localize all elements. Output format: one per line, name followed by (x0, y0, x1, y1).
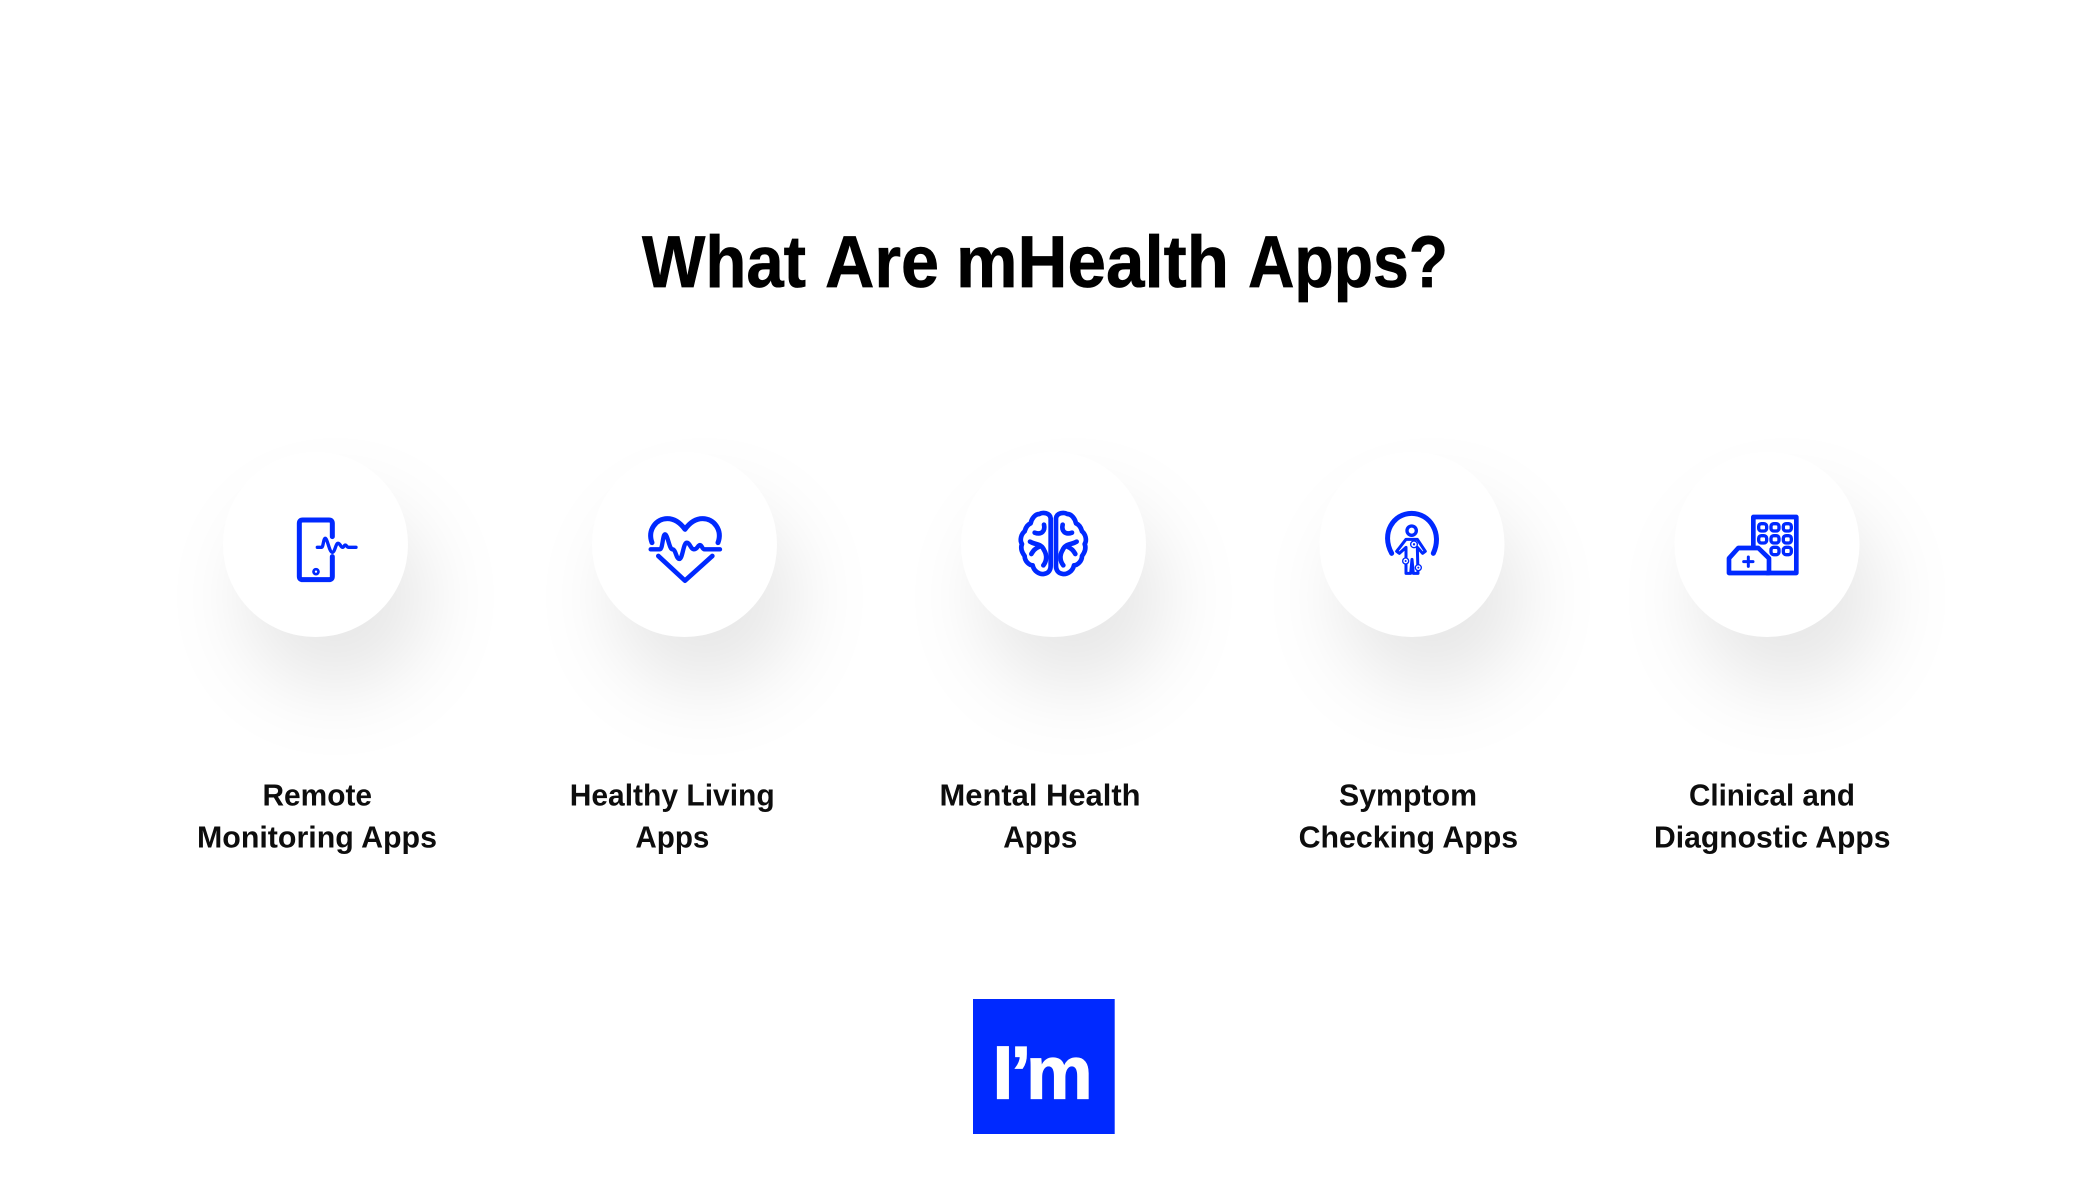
icon circle: healthy living (592, 452, 777, 637)
label: healthy living apps (570, 778, 775, 854)
label: clinical and diagnostic apps: Clinical and (1689, 778, 1855, 812)
label: symptom checking apps: Symptom (1339, 778, 1477, 812)
label: healthy living apps: Apps (635, 820, 709, 854)
logo (973, 999, 1115, 1134)
icon circle: remote monitoring (223, 452, 408, 637)
label: remote monitoring apps: Monitoring Apps (197, 820, 437, 854)
label: mental health apps (940, 778, 1140, 854)
icon circle: clinical and diagnostic (1674, 452, 1860, 637)
icon: person with symptom markers (1388, 513, 1436, 573)
panel: clinical and diagnostic apps (1654, 452, 1890, 854)
label: symptom checking apps (1299, 778, 1518, 854)
icon circle: mental health (961, 452, 1146, 637)
label: remote monitoring apps (197, 778, 437, 854)
title (642, 222, 1448, 303)
label: mental health apps: Apps (1003, 820, 1077, 854)
title: Apps? (1248, 222, 1448, 303)
label: healthy living apps: Healthy Living (570, 778, 775, 812)
title: Are (825, 222, 939, 303)
title: mHealth (956, 222, 1229, 303)
logo: I’m (992, 1030, 1093, 1114)
panel: symptom checking apps (1299, 452, 1518, 854)
label: clinical and diagnostic apps (1654, 778, 1890, 854)
icon: brain (1021, 513, 1086, 574)
icon: phone with pulse (299, 520, 356, 580)
icon: heart with pulse (651, 519, 720, 581)
title: What (642, 222, 806, 303)
icon circle: symptom checking (1320, 452, 1504, 637)
label: symptom checking apps: Checking Apps (1299, 820, 1518, 854)
icon: hospital buildings (1729, 517, 1796, 573)
panel: healthy living apps (570, 452, 777, 854)
panel: mental health apps (940, 452, 1146, 854)
label: mental health apps: Mental Health (940, 778, 1140, 812)
label: clinical and diagnostic apps: Diagnostic Apps (1654, 820, 1890, 854)
label: remote monitoring apps: Remote (262, 778, 372, 812)
panel: remote monitoring apps (197, 452, 437, 854)
